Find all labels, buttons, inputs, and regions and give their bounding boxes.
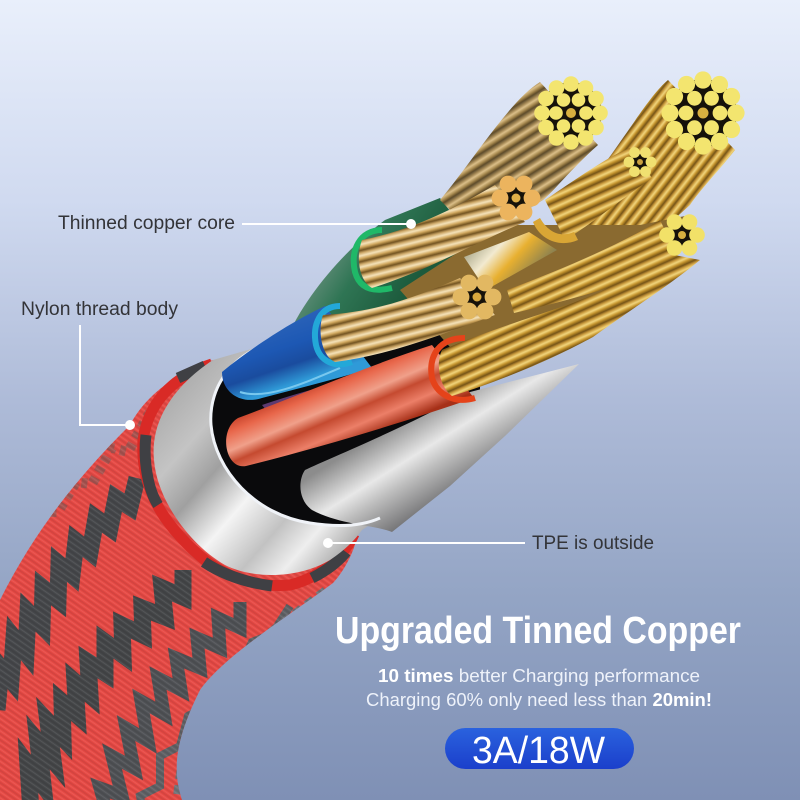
callout: nylon thread body xyxy=(21,299,178,430)
top right copper core xyxy=(540,80,735,262)
middle copper core xyxy=(507,220,678,313)
green strand wire xyxy=(359,185,525,288)
gap fill between wires xyxy=(400,215,690,370)
callout: nylon thread body: Nylon thread body xyxy=(21,299,178,320)
wires xyxy=(315,80,735,400)
wire end caps xyxy=(453,71,745,319)
green sheath ring xyxy=(354,230,392,290)
cap: blue wire core xyxy=(453,275,501,319)
cap: top right core xyxy=(661,71,745,155)
subtext line 1: 10 times better Charging performance xyxy=(378,665,700,686)
silver inner tube xyxy=(300,364,579,532)
cap: red wire core xyxy=(659,214,705,256)
callout: thinned copper core xyxy=(58,213,416,234)
cap: green wire core xyxy=(492,176,540,220)
opening rim xyxy=(211,341,380,526)
blue wire sheath xyxy=(222,306,385,415)
cap: top left core xyxy=(534,76,608,150)
silver ferrule xyxy=(154,341,385,575)
blue sheath ring xyxy=(315,306,352,364)
chrome core segment xyxy=(464,232,557,290)
cable opening interior xyxy=(211,300,480,526)
callout: thinned copper core: Thinned copper core xyxy=(58,213,235,234)
callout: TPE is outside xyxy=(323,533,654,554)
callout: TPE is outside: TPE is outside xyxy=(532,533,654,554)
badge: 3A/18W: 3A/18W xyxy=(472,730,605,772)
braid end ring xyxy=(143,364,354,586)
cap: thin core xyxy=(624,147,656,177)
green inner sheath xyxy=(285,198,480,342)
red sheath ring xyxy=(431,338,475,400)
red strand wire xyxy=(439,253,700,396)
title: Upgraded Tinned Copper xyxy=(335,610,741,652)
thin core xyxy=(545,148,652,240)
blue strand wire xyxy=(321,278,495,362)
red wire sheath xyxy=(226,345,474,466)
thin core gold end xyxy=(533,218,578,243)
subtext line 2: Charging 60% only need less than 20min! xyxy=(366,689,712,710)
nylon braided body xyxy=(0,360,358,800)
top left copper core xyxy=(440,82,598,240)
badge: 3A/18W xyxy=(445,728,634,772)
